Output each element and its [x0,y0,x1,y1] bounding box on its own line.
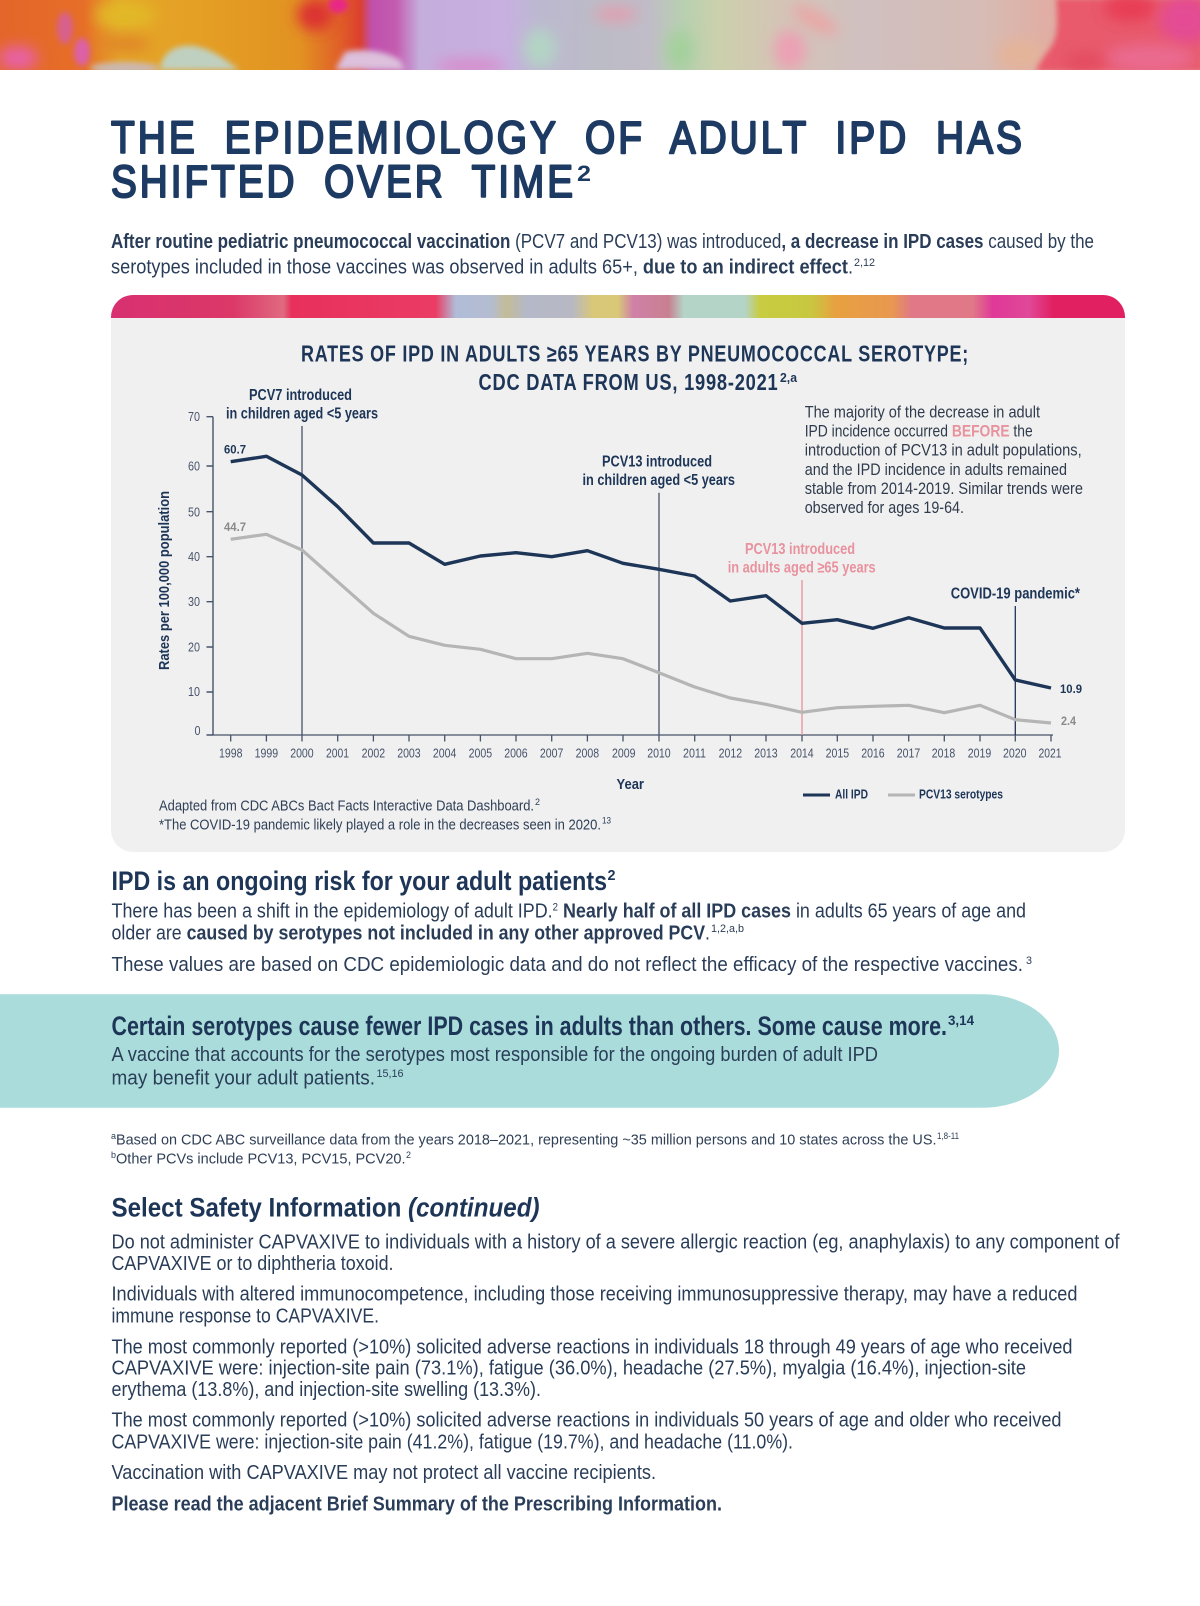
x axis: 2019 [968,746,991,760]
callout: decrease before PCV13: IPD incidence occurred BEFORE the [805,422,1033,441]
chart source note [159,797,611,833]
legend: All IPD [835,788,868,802]
x axis: 2011 [683,746,706,760]
y axis [188,410,213,738]
x axis: 2000 [290,746,314,760]
line: PCV13 serotypes [224,520,1076,728]
band text: may benefit your adult patients. [112,1066,375,1090]
text block: ongoing risk: 2 [553,901,558,913]
y axis: 40 [188,550,200,564]
callout: decrease before PCV13: stable from 2014-2019. Similar trends were [805,479,1083,498]
x axis: 2015 [826,746,849,760]
chart title: RATES OF IPD IN ADULTS ≥65 YEARS BY PNEUMOCOCCAL SEROTYPE; [301,340,969,366]
line: All IPD: 10.9 [1060,682,1082,696]
footnotes: b [111,1150,116,1160]
banner: tie-dye color band [0,0,1200,74]
x axis: 2010 [647,746,671,760]
title: SHIFTED OVER TIME [111,156,576,207]
panel: chart card [111,295,1125,852]
text block: safety information: Individuals with altered immunocompetence, including those receiving immunosuppressive therapy, may have a reduced [112,1283,1078,1306]
marker: PCV7 introduced in children: in children aged <5 years [226,405,378,422]
band shape [0,994,1059,1108]
x axis: 2002 [362,746,385,760]
x axis: 2018 [932,746,955,760]
text block: ongoing risk: in adults 65 years of age and [797,899,1060,922]
footnotes: 1,8-11 [937,1131,959,1141]
panel background [111,318,1125,852]
text block: ongoing risk: There has been a shift in the epidemiology of adult IPD. [112,899,616,922]
callout: decrease before PCV13: and the IPD incidence in adults remained [805,460,1067,479]
title: THE EPIDEMIOLOGY OF ADULT IPD HAS [111,112,1025,163]
y axis: 70 [188,410,200,424]
x axis: 1999 [255,746,278,760]
marker: PCV13 introduced in children: PCV13 introduced [602,454,712,471]
y axis: 30 [188,595,200,609]
chart source note: *The COVID-19 pandemic likely played a role in the decreases seen in 2020. [159,816,601,833]
footnotes: 2 [406,1150,411,1160]
text block: safety information: Vaccination with CAPVAXIVE may not protect all vaccine recipients. [112,1461,656,1484]
text block: ongoing risk [112,899,1032,976]
x axis: 2003 [397,746,421,760]
y axis: 20 [188,641,200,655]
x axis: 2016 [861,746,885,760]
marker: PCV13 introduced in children: in children aged <5 years [582,472,735,489]
footnotes: Based on CDC ABC surveillance data from the years 2018–2021, representing ~35 million persons and 10 states across the US. [116,1131,936,1148]
x axis: 2008 [576,746,599,760]
intro paragraph: serotypes included in those vaccines was observed in adults 65+, due to an indirect effect. [111,256,853,279]
text block: safety information [112,1230,1120,1516]
band text: A vaccine that accounts for the serotypes most responsible for the ongoing burden of adult IPD [112,1043,878,1066]
x axis: 2013 [754,746,778,760]
footnotes [111,1131,959,1167]
x axis: 1998 [219,746,243,760]
marker: PCV13 introduced in adults [728,541,876,735]
text block: safety information: CAPVAXIVE were: injection-site pain (41.2%), fatigue (19.7%), and headache (11.0%). [112,1430,793,1453]
intro paragraph: 2,12 [854,257,875,269]
callout: decrease before PCV13: The majority of the decrease in adult [805,403,1040,422]
text block: ongoing risk: Nearly half of all IPD cases [558,899,791,922]
band text: Certain serotypes cause fewer IPD cases in adults than others. Some cause more. [112,1011,947,1041]
x axis: 2006 [504,746,528,760]
band text: 3,14 [948,1012,974,1028]
marker: COVID-19 pandemic: COVID-19 pandemic* [951,585,1081,602]
intro paragraph: After routine pediatric pneumococcal vaccination (PCV7 and PCV13) was introduced, a decrease in IPD cases caused by the [111,230,1094,253]
y axis: 50 [188,506,200,520]
text block: safety information: erythema (13.8%), and injection-site swelling (13.3%). [112,1378,541,1401]
line: All IPD: 60.7 [224,442,246,456]
x axis: 2007 [540,746,563,760]
marker: PCV13 introduced in adults: in adults aged ≥65 years [728,559,876,576]
band text [112,1011,974,1090]
footnotes: Other PCVs include PCV13, PCV15, PCV20. [116,1150,406,1167]
text block: ongoing risk: These values are based on CDC epidemiologic data and do not reflect the efficacy of the respective vaccines. [112,953,1023,976]
section heading: ongoing risk: 2 [608,867,616,884]
x axis: 2020 [1003,746,1027,760]
chart source note: Adapted from CDC ABCs Bact Facts Interactive Data Dashboard. [159,798,534,815]
band text: 15,16 [376,1068,404,1080]
x axis title: Year [616,776,644,793]
line: PCV13 serotypes: 44.7 [224,520,246,534]
line: All IPD [224,442,1082,696]
text block: safety information: Please read the adjacent Brief Summary of the Prescribing Information. [112,1493,722,1516]
marker: PCV7 introduced in children [226,387,378,735]
callout: decrease before PCV13 [805,403,1083,517]
callout: decrease before PCV13: observed for ages 19-64. [805,498,964,517]
x axis: 2017 [897,746,920,760]
text block: ongoing risk: 1,2,a,b [711,923,744,935]
title [111,112,1025,207]
text block: safety information: The most commonly reported (>10%) solicited adverse reactions in individuals 18 through 49 years of age who received [112,1335,1072,1358]
chart title: 2,a [780,370,798,385]
callout band: certain serotypes [0,994,1059,1108]
title: 2 [577,161,591,186]
x axis: 2012 [719,746,742,760]
y axis: 60 [188,460,200,474]
marker: PCV13 introduced in adults: PCV13 introduced [745,541,855,558]
x axis: 2014 [790,746,814,760]
footnotes: a [111,1131,116,1141]
chart source note: 13 [602,816,611,826]
section heading: select safety information: Select Safety Information (continued) [112,1193,540,1223]
chart title: CDC DATA FROM US, 1998-2021 [478,369,778,395]
chart source note: 2 [535,797,540,807]
text block: ongoing risk: older are caused by serotypes not included in any other approved PCV. [112,921,710,944]
text block: safety information: CAPVAXIVE were: injection-site pain (73.1%), fatigue (36.0%), headache (27.5%), myalgia (16.4%), injection-site [112,1356,1026,1379]
callout: decrease before PCV13: introduction of PCV13 in adult populations, [805,441,1082,460]
x axis: 2005 [469,746,492,760]
section heading: ongoing risk: IPD is an ongoing risk for your adult patients [112,866,607,896]
text block: safety information: The most commonly reported (>10%) solicited adverse reactions in individuals 50 years of age and older who received [112,1409,1062,1432]
text block: safety information: CAPVAXIVE or to diphtheria toxoid. [112,1252,394,1275]
y axis: 0 [194,724,201,738]
line: PCV13 serotypes: 2.4 [1061,714,1076,728]
x axis: 2001 [326,746,349,760]
marker: PCV7 introduced in children: PCV7 introduced [249,387,352,404]
chart title [301,340,969,395]
legend: PCV13 serotypes [919,788,1003,802]
y axis title: Rates per 100,000 population [157,491,173,670]
x axis: 2021 [1038,746,1062,760]
x axis: 2009 [612,746,636,760]
legend [803,788,1003,802]
y axis: 10 [188,685,200,699]
x axis [213,735,1062,760]
marker: PCV13 introduced in children [582,454,735,735]
intro paragraph [111,230,1094,279]
panel color header [111,295,1125,318]
x axis: 2004 [433,746,456,760]
text block: safety information: immune response to CAPVAXIVE. [112,1304,379,1327]
text block: ongoing risk: 3 [1026,955,1032,967]
